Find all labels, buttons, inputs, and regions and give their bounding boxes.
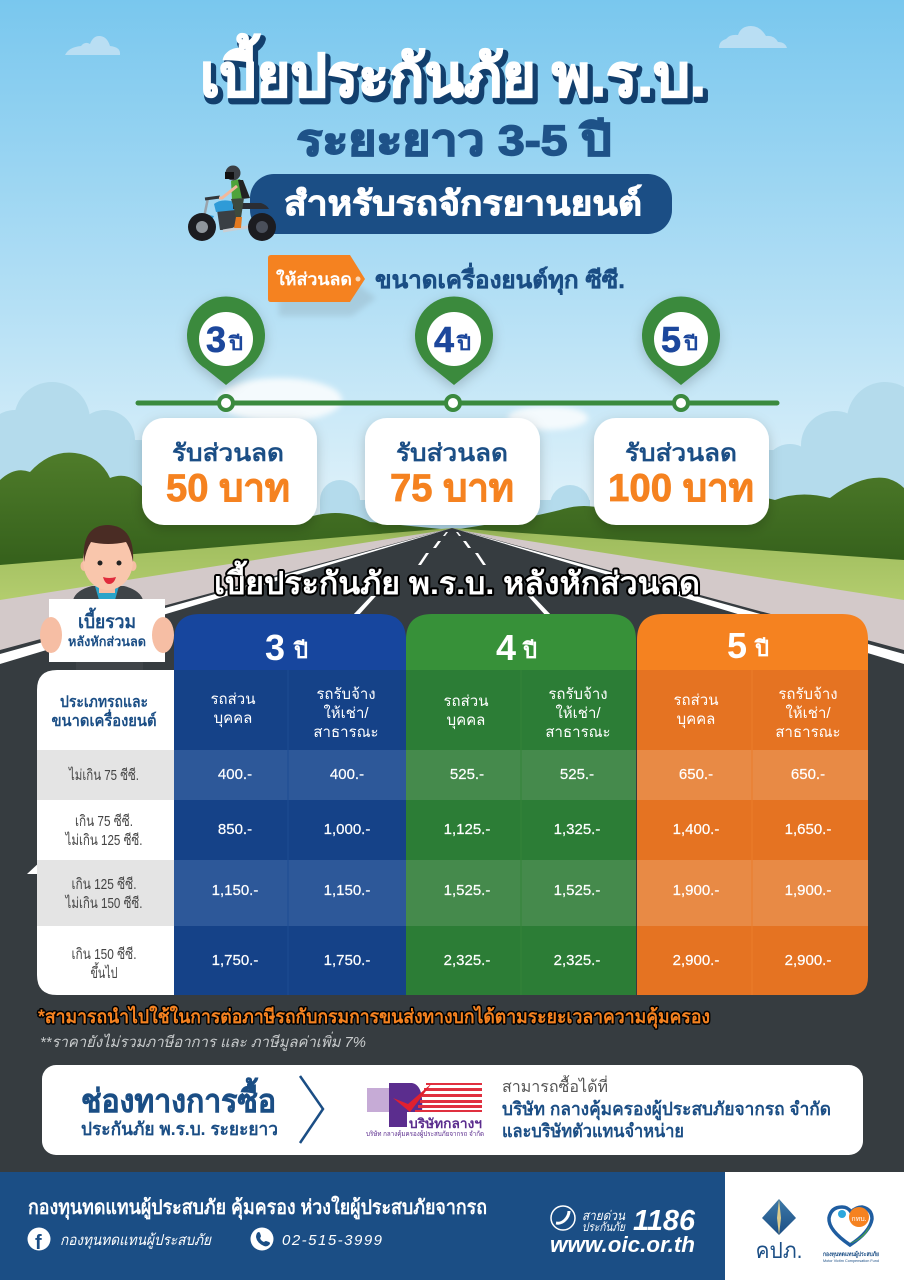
- arrow: chevron: [300, 1076, 323, 1143]
- card: 50 baht: รับส่วนลด: [172, 440, 284, 467]
- pin: 3 years: ปี: [228, 333, 243, 355]
- discount description: ขนาดเครื่องยนต์ทุก ซีซี.: [375, 262, 625, 296]
- column group: 3 years: 1,000.-: [324, 821, 370, 838]
- row labels column: [27, 670, 174, 995]
- motorcycle type banner: [250, 174, 672, 234]
- column group: 3 years: บุคคล: [214, 710, 252, 728]
- row labels column: เกิน 150 ซีซี.: [72, 946, 136, 963]
- logo: victims compensation fund: กองทุนทดแทนผู้ประสบภัย: [823, 1250, 879, 1259]
- main title: เบี้ยประกันภัย พ.ร.บ.: [200, 34, 706, 109]
- column group: 4 years: 2,325.-: [554, 952, 600, 969]
- column group: 4 years: [406, 614, 636, 995]
- hotline: www.oic.or.th: [550, 1232, 695, 1257]
- panel: purchase channels: บริษัท กลางคุ้มครองผู้ประสบภัยจากรถ จำกัด: [502, 1099, 831, 1121]
- main title: เบี้ยประกันภัย พ.ร.บ.: [203, 38, 709, 113]
- road surface and lower background: [0, 528, 904, 1280]
- column group: 4 years: 525.-: [450, 766, 484, 783]
- distant clouds: [0, 378, 904, 540]
- card: 50 baht: [142, 418, 317, 525]
- footer bar: กองทุนทดแทนผู้ประสบภัย: [60, 1232, 212, 1249]
- pin: 5 years: [642, 297, 720, 385]
- column group: 5 years: 650.-: [791, 766, 825, 783]
- character holding sign: [40, 525, 174, 671]
- column group: 3 years: ให้เช่า/: [323, 704, 369, 722]
- column group: 3 years: 850.-: [218, 821, 252, 838]
- column group: 5 years: 2,900.-: [785, 952, 831, 969]
- column group: 4 years: 1,525.-: [554, 882, 600, 899]
- column group: 3 years: 3: [265, 627, 285, 668]
- pin: 3 years: 3: [206, 319, 226, 360]
- column group: 3 years: รถส่วน: [211, 691, 255, 708]
- column group: 5 years: 650.-: [679, 766, 713, 783]
- logo panel: [725, 1172, 904, 1280]
- panel: purchase channels: [42, 1065, 863, 1155]
- panel: purchase channels: และบริษัทตัวแทนจำหน่าย: [502, 1121, 684, 1141]
- subtitle: ระยะยาว 3-5 ปี: [296, 117, 612, 165]
- panel: purchase channels: ช่องทางการซื้อ: [81, 1077, 276, 1119]
- row labels column: เกิน 125 ซีซี.: [72, 876, 136, 893]
- logo: central protection company: บริษัท กลางคุ้มครองผู้ประสบภัยจากรถ จำกัด: [366, 1130, 484, 1138]
- sky background: [0, 0, 904, 560]
- column group: 4 years: 1,325.-: [554, 821, 600, 838]
- column group: 4 years: ให้เช่า/: [555, 704, 601, 722]
- footnote: renewal: *สามารถนำไปใช้ในการต่อภาษีรถกับกรมการขนส่งทางบกได้ตามระยะเวลาความคุ้มครอง: [38, 1005, 710, 1029]
- logo: victims compensation fund: [823, 1207, 879, 1263]
- tree line: [0, 453, 904, 590]
- motorcycle type banner: สำหรับรถจักรยานยนต์: [284, 184, 642, 223]
- card: 75 baht: รับส่วนลด: [396, 440, 508, 467]
- column group: 3 years: รถรับจ้าง: [316, 686, 376, 703]
- footer bar: 02-515-3999: [282, 1232, 383, 1249]
- logo: victims compensation fund: Motor Victim Compensation Fund: [823, 1258, 879, 1263]
- column group: 4 years: 1,125.-: [444, 821, 490, 838]
- column group: 4 years: ปี: [522, 638, 537, 663]
- column group: 5 years: 2,900.-: [673, 952, 719, 969]
- footer bar: [0, 1172, 725, 1280]
- column group: 5 years: 1,650.-: [785, 821, 831, 838]
- row labels column: ไม่เกิน 150 ซีซี.: [65, 894, 142, 912]
- card: 100 baht: [594, 418, 769, 525]
- logo: victims compensation fund: กทบ.: [851, 1216, 867, 1223]
- card: 100 baht: รับส่วนลด: [625, 440, 737, 467]
- column group: 3 years: 1,150.-: [212, 882, 258, 899]
- pin: 5 years: ปี: [683, 333, 698, 355]
- logo: OIC: [756, 1199, 802, 1263]
- column group: 4 years: รถส่วน: [444, 693, 488, 710]
- column group: 3 years: ปี: [293, 638, 308, 663]
- column group: 4 years: สาธารณะ: [545, 724, 611, 741]
- discount tag: [268, 255, 376, 316]
- timeline: [138, 396, 777, 410]
- column group: 3 years: 1,750.-: [324, 952, 370, 969]
- hotline: สายด่วน: [582, 1208, 626, 1223]
- table: [27, 614, 868, 995]
- footnote: tax: **ราคายังไม่รวมภาษีอาการ และ ภาษีมูลค่าเพิ่ม 7%: [40, 1031, 366, 1051]
- row labels column: ประเภทรถและ: [60, 694, 148, 711]
- road shoulder: [0, 528, 904, 652]
- pin: 4 years: ปี: [456, 333, 471, 355]
- column group: 3 years: สาธารณะ: [313, 724, 379, 741]
- footer bar: กองทุนทดแทนผู้ประสบภัย คุ้มครอง ห่วงใยผู้ประสบภัยจากรถ: [28, 1195, 487, 1221]
- logo: central protection company: [366, 1083, 484, 1138]
- icon: motorcycle rider: [188, 166, 276, 241]
- column group: 5 years: บุคคล: [677, 711, 715, 729]
- column group: 3 years: [174, 614, 406, 995]
- card: 75 baht: [365, 418, 540, 525]
- row labels column: ไม่เกิน 75 ซีซี.: [68, 766, 139, 784]
- column group: 4 years: 1,525.-: [444, 882, 490, 899]
- column group: 5 years: สาธารณะ: [775, 724, 841, 741]
- column group: 5 years: รถรับจ้าง: [778, 686, 838, 703]
- column group: 5 years: ปี: [754, 636, 769, 661]
- column group: 3 years: 1,750.-: [212, 952, 258, 969]
- column group: 4 years: 4: [496, 627, 516, 668]
- hotline: ประกันภัย: [582, 1220, 626, 1234]
- pin: 4 years: [415, 297, 493, 385]
- row labels column: ขนาดเครื่องยนต์: [52, 709, 156, 730]
- row labels column: ขึ้นไป: [90, 962, 118, 982]
- card: 100 baht: 100 บาท: [608, 467, 754, 510]
- panel: purchase channels: สามารถซื้อได้ที่: [502, 1075, 608, 1096]
- pin: 5 years: 5: [661, 319, 681, 360]
- column group: 5 years: 5: [727, 625, 747, 666]
- character holding sign: หลังหักส่วนลด: [68, 634, 146, 649]
- column group: 4 years: 2,325.-: [444, 952, 490, 969]
- column group: 5 years: ให้เช่า/: [785, 704, 831, 722]
- logo: OIC: คปภ.: [756, 1238, 802, 1263]
- column group: 3 years: 1,150.-: [324, 882, 370, 899]
- heading: premium after discount: เบี้ยประกันภัย พ.ร.บ. หลังหักส่วนลด: [214, 560, 700, 601]
- column group: 4 years: รถรับจ้าง: [548, 686, 608, 703]
- pin: 3 years: [187, 297, 265, 385]
- logo: central protection company: บริษัทกลางฯ: [409, 1116, 482, 1131]
- column group: 5 years: 1,900.-: [785, 882, 831, 899]
- column group: 5 years: [637, 614, 868, 995]
- icon: facebook: [28, 1228, 50, 1254]
- column group: 5 years: 1,400.-: [673, 821, 719, 838]
- hotline: [550, 1205, 696, 1257]
- road markings: [0, 528, 904, 664]
- row labels column: เกิน 75 ซีซี.: [75, 813, 133, 830]
- panel: purchase channels: ประกันภัย พ.ร.บ. ระยะยาว: [81, 1119, 278, 1139]
- column group: 3 years: 400.-: [330, 766, 364, 783]
- column group: 4 years: บุคคล: [447, 712, 485, 730]
- icon: telephone: [250, 1228, 274, 1250]
- hotline: 1186: [633, 1205, 696, 1237]
- grass: [0, 528, 904, 610]
- pin: 4 years: 4: [434, 319, 454, 360]
- card: 50 baht: 50 บาท: [166, 467, 290, 510]
- small clouds in the sky: [65, 26, 787, 55]
- icon: facebook: f: [35, 1232, 42, 1254]
- column group: 3 years: 400.-: [218, 766, 252, 783]
- discount tag: ให้ส่วนลด: [276, 269, 352, 289]
- row labels column: ไม่เกิน 125 ซีซี.: [65, 831, 142, 849]
- character holding sign: เบี้ยรวม: [78, 607, 136, 633]
- column group: 4 years: 525.-: [560, 766, 594, 783]
- column group: 5 years: รถส่วน: [674, 692, 718, 709]
- card: 75 baht: 75 บาท: [390, 467, 514, 510]
- column group: 5 years: 1,900.-: [673, 882, 719, 899]
